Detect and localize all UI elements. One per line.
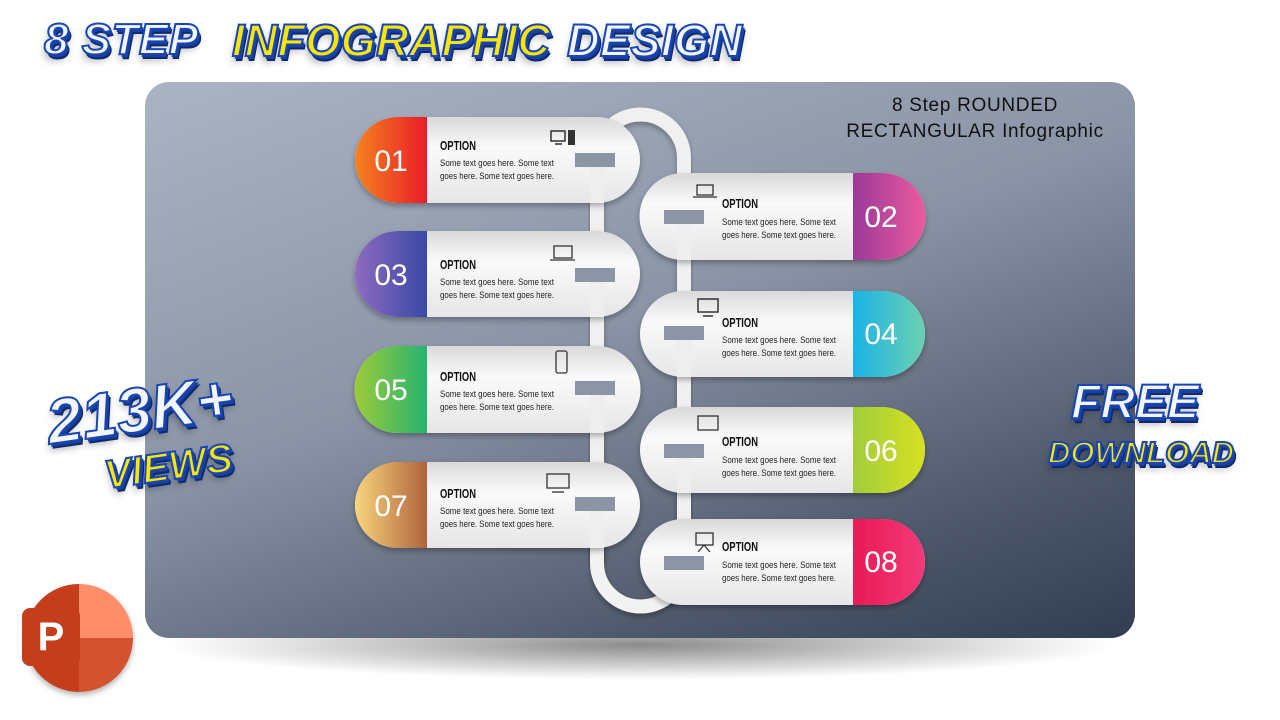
step 04: Some text goes here. Some text (722, 335, 836, 346)
free download badge (1047, 376, 1238, 474)
step 07: 07 (374, 490, 408, 523)
connector: top loop (597, 114, 684, 560)
step 04 (640, 291, 925, 377)
step 05 (354, 346, 640, 433)
step 02: OPTION (722, 196, 758, 211)
title: INFOGRAPHIC (232, 15, 550, 66)
step 07: goes here. Some text goes here. (440, 519, 554, 530)
step 08: OPTION (722, 539, 758, 554)
icon: powerpoint logo: P (38, 615, 64, 659)
step 05: Some text goes here. Some text (440, 389, 554, 400)
step 01 (355, 117, 640, 203)
views badge: VIEWS (102, 436, 236, 497)
step 03: 03 (374, 259, 408, 292)
connector strips over pills (590, 167, 691, 548)
step 06: Some text goes here. Some text (722, 455, 836, 466)
step 07: Some text goes here. Some text (440, 506, 554, 517)
step 03 (355, 231, 640, 317)
step 08: Some text goes here. Some text (722, 560, 836, 571)
step 06: OPTION (722, 434, 758, 449)
step 04: OPTION (722, 315, 758, 330)
step 03: Some text goes here. Some text (440, 277, 554, 288)
step 07: OPTION (440, 486, 476, 501)
title (40, 15, 746, 67)
views badge: 213K+ (42, 363, 237, 458)
step 02: Some text goes here. Some text (722, 217, 836, 228)
panel subtitle: RECTANGULAR Infographic (846, 121, 1104, 142)
step 01: goes here. Some text goes here. (440, 171, 554, 182)
panel subtitle: 8 Step ROUNDED (892, 95, 1058, 116)
step 02: goes here. Some text goes here. (722, 230, 836, 241)
panel shadow (160, 610, 1120, 680)
step 04: 04 (864, 318, 898, 351)
step 08: goes here. Some text goes here. (722, 573, 836, 584)
step 01: 01 (374, 145, 408, 178)
step 01: Some text goes here. Some text (440, 158, 554, 169)
step 07 (355, 462, 640, 548)
step 03: goes here. Some text goes here. (440, 290, 554, 301)
free download badge: FREE (1071, 376, 1199, 429)
step 03: OPTION (440, 257, 476, 272)
step 05: goes here. Some text goes here. (440, 402, 554, 413)
main panel (145, 82, 1135, 638)
step 06 (640, 407, 925, 493)
step 04: goes here. Some text goes here. (722, 348, 836, 359)
step 08: 08 (864, 546, 898, 579)
title: DESIGN (567, 15, 743, 66)
step 02 (640, 173, 926, 260)
free download badge: DOWNLOAD (1048, 435, 1234, 470)
panel subtitle (846, 95, 1104, 142)
step 01: OPTION (440, 138, 476, 153)
step 02: 02 (864, 201, 898, 234)
step 06: 06 (864, 435, 898, 468)
connector: bottom loop (597, 470, 684, 606)
step 06: goes here. Some text goes here. (722, 468, 836, 479)
title: 8 STEP (44, 15, 199, 64)
icon: powerpoint logo (22, 584, 136, 698)
step 05: 05 (374, 374, 408, 407)
step 05: OPTION (440, 369, 476, 384)
step 08 (640, 519, 925, 605)
